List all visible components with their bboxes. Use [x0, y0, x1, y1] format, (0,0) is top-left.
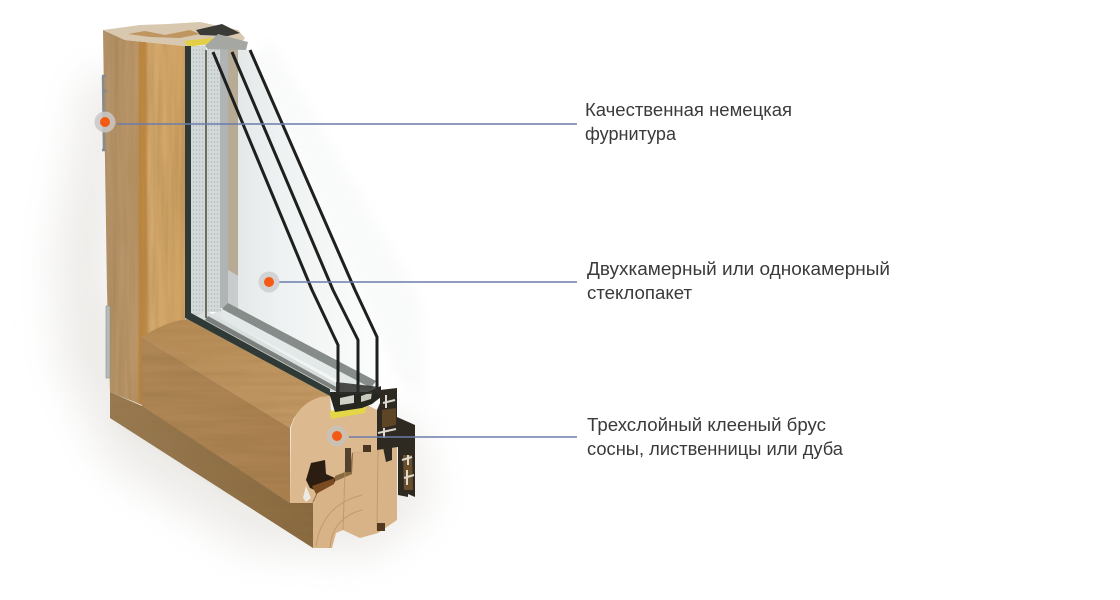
- bottom spacers: [191, 311, 345, 395]
- window shadow: [55, 40, 430, 555]
- top cut: [103, 22, 245, 46]
- seam backing: [312, 445, 378, 503]
- label: glazing: стеклопакет: [587, 283, 692, 303]
- marker: timber: [326, 426, 348, 446]
- label: timber: сосны, лиственницы или дуба: [587, 439, 844, 459]
- window cross-section illustration: [102, 22, 415, 548]
- label: glazing: Двухкамерный или однокамерный: [587, 259, 890, 279]
- label: timber: [587, 415, 844, 459]
- leader line: timber: [349, 436, 577, 438]
- lower grey shade on glass: [228, 270, 238, 318]
- panes black lines: [213, 50, 377, 392]
- seal cavity: [306, 460, 335, 491]
- bottom shadow line on glass: [336, 382, 380, 394]
- grey strip: [220, 46, 229, 308]
- label: hardware: [585, 100, 792, 144]
- marker: glazing: [258, 272, 280, 292]
- pane spacer: inner textured strip: [191, 46, 206, 318]
- door hinge lower: [106, 306, 110, 378]
- aluminium profile: [377, 388, 415, 497]
- sill front: [142, 337, 290, 503]
- end grain rings: [316, 450, 378, 548]
- marker: hardware: [94, 112, 116, 132]
- pane spacer: outer textured strip: [207, 46, 221, 312]
- label: glazing: [587, 259, 890, 303]
- tan reveal: [228, 46, 238, 276]
- base strip: [110, 392, 313, 548]
- label: hardware: Качественная немецкая: [585, 100, 792, 120]
- leader line: hardware: [117, 123, 577, 125]
- door hinge upper: [102, 76, 107, 150]
- end grain sash: [290, 396, 377, 503]
- label: timber: Трехслойный клееный брус: [587, 415, 826, 435]
- inner frame dark edge: [185, 46, 330, 396]
- yellow gasket: [330, 405, 367, 419]
- label: hardware: фурнитура: [585, 124, 677, 144]
- end grain frame: [313, 447, 397, 548]
- glass area: [205, 50, 377, 392]
- glass bead black: [330, 386, 381, 412]
- post wood: [103, 30, 185, 405]
- leader line: glazing: [279, 281, 577, 283]
- sill bevel: [142, 319, 330, 428]
